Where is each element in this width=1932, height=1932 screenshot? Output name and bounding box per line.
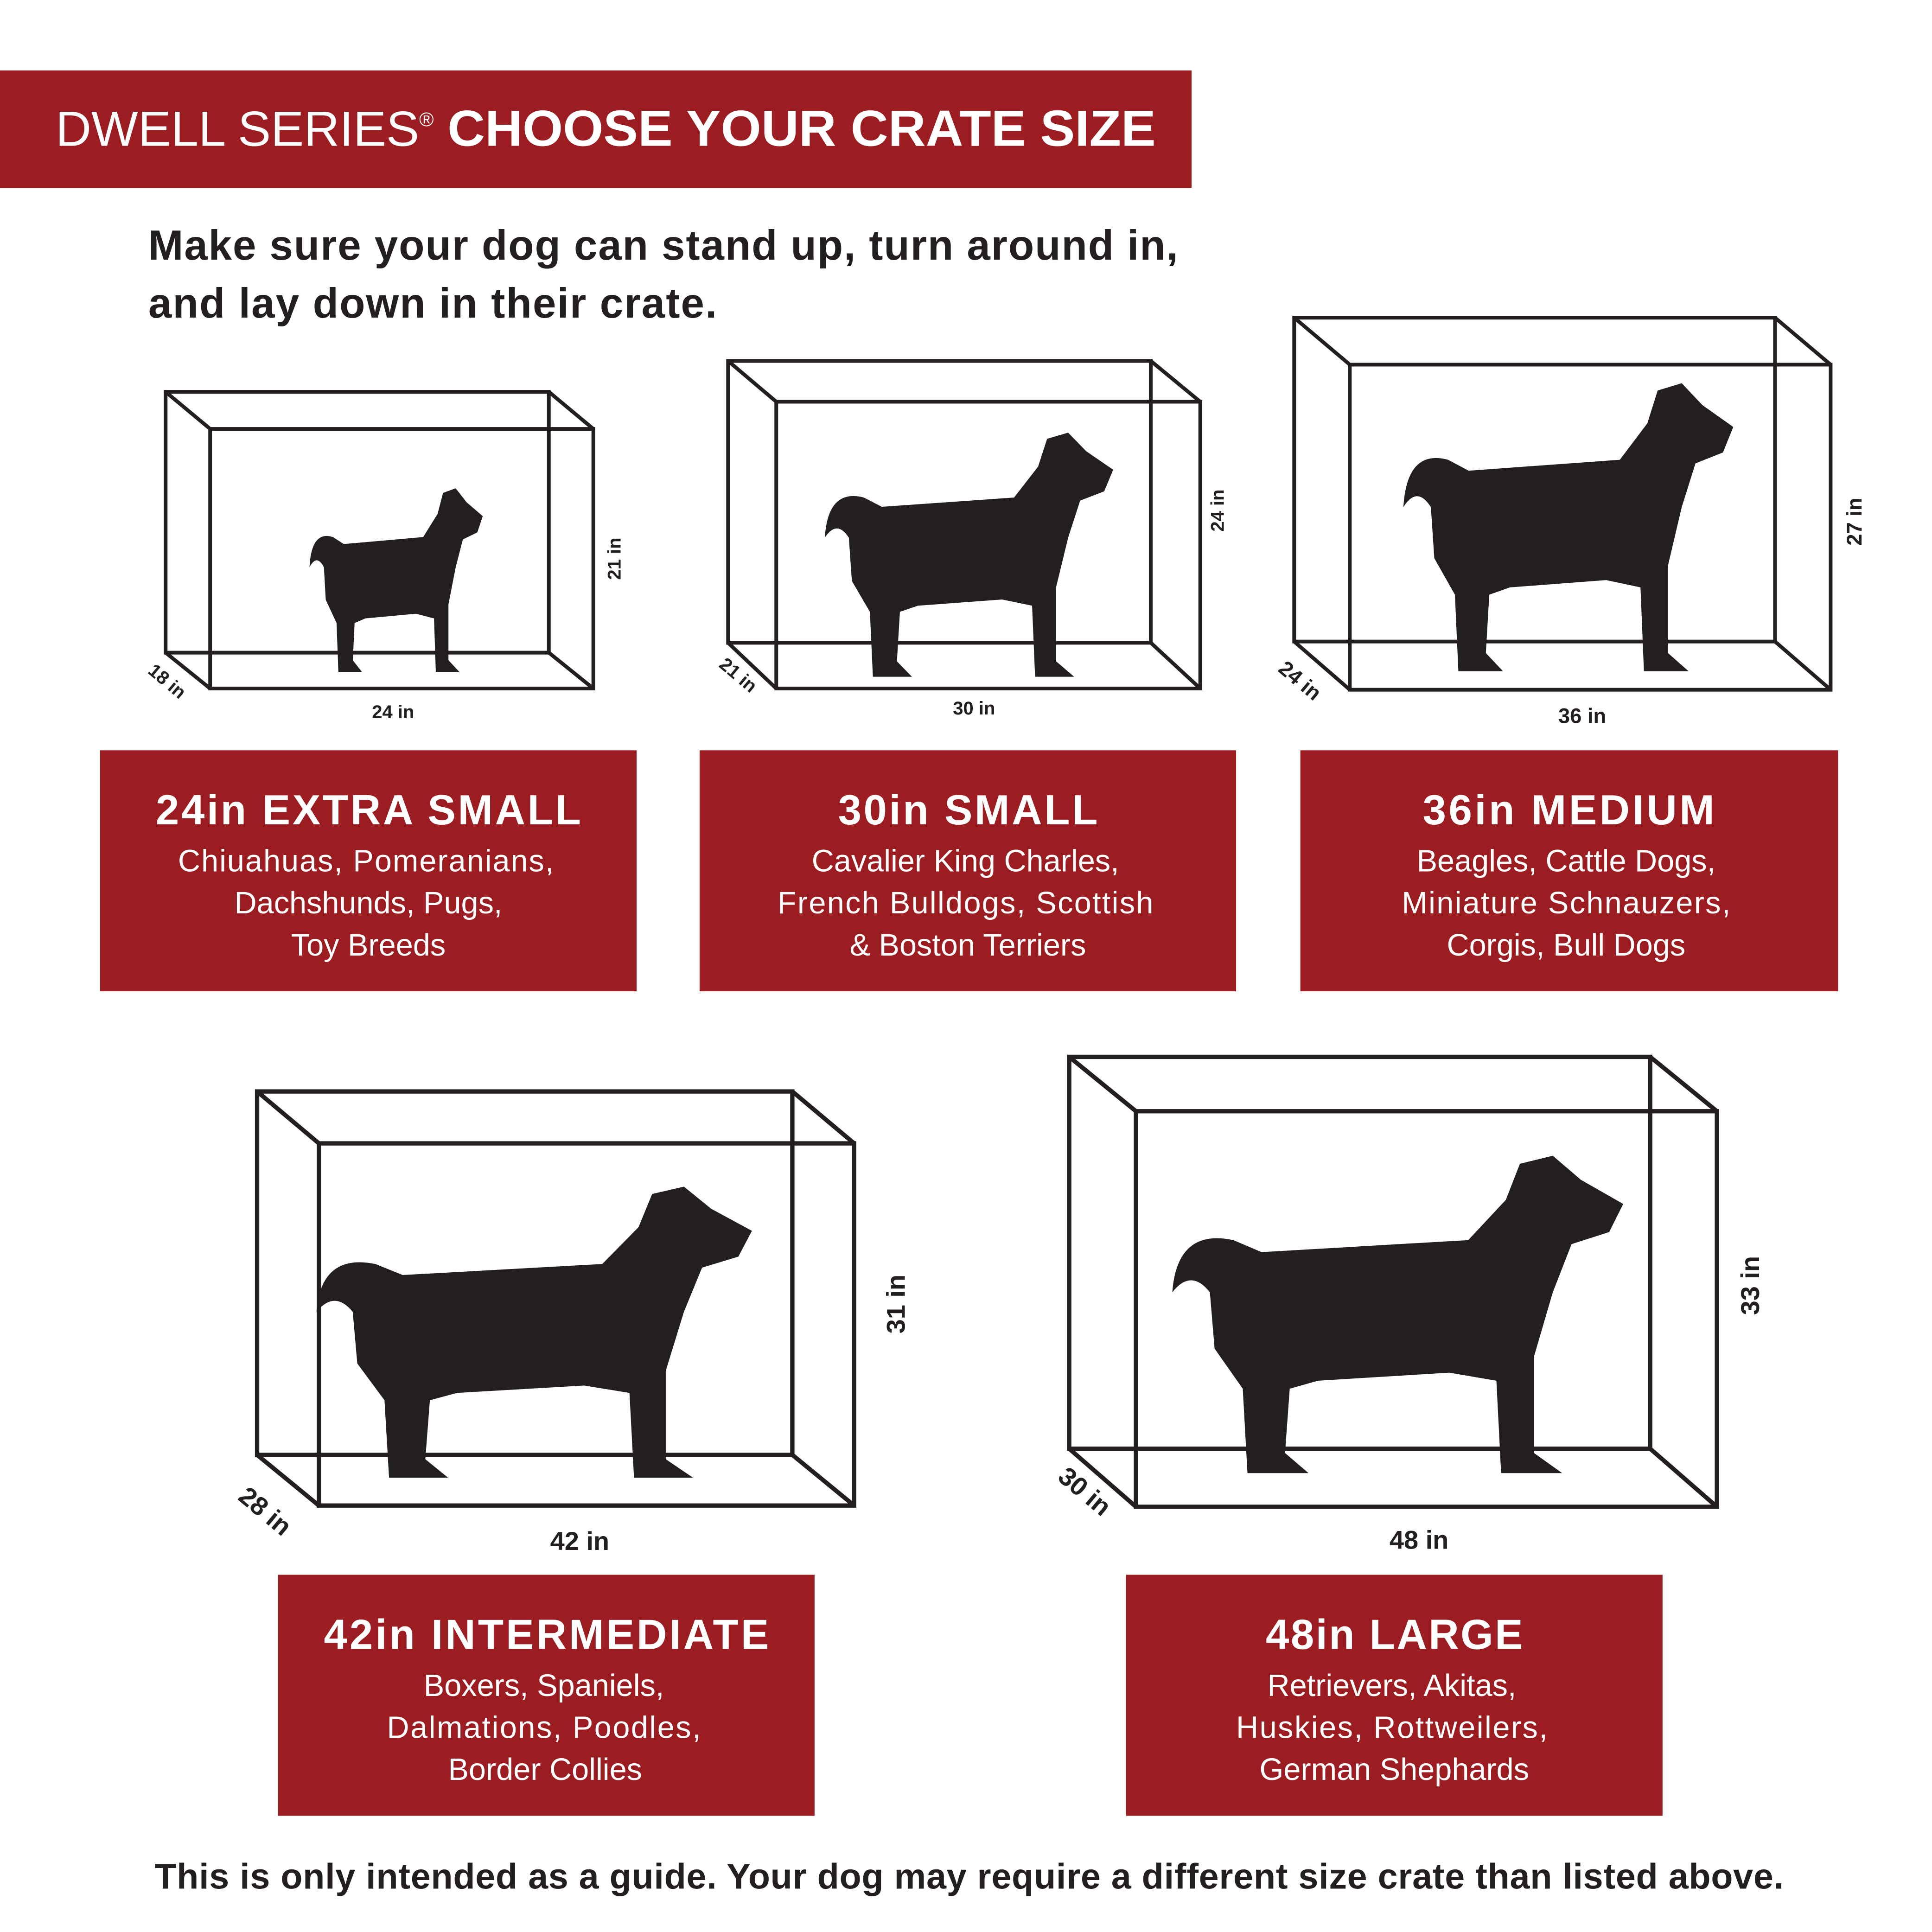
crate: medium	[1294, 318, 1830, 690]
footer note: This is only intended as a guide. Your dog may require a different size crate than listed above.	[154, 1857, 1784, 1897]
panel: intermediate: Boxers, Spaniels,	[424, 1669, 664, 1703]
panel: intermediate: 42in INTERMEDIATE	[324, 1611, 769, 1658]
dimensions: small: 24 in	[1207, 490, 1228, 532]
panel: medium	[1301, 750, 1838, 991]
dimensions: extra small	[144, 537, 625, 722]
dog: intermediate	[317, 1186, 752, 1478]
panel: intermediate: Border Collies	[448, 1753, 642, 1787]
panel: extra small: Dachshunds, Pugs,	[235, 886, 502, 920]
dimensions: medium	[1274, 497, 1866, 728]
dimensions: small	[715, 490, 1228, 719]
panel: small: & Boston Terriers	[850, 928, 1086, 963]
panel: extra small: 24in EXTRA SMALL	[156, 787, 581, 834]
dimensions: medium: 36 in	[1558, 704, 1606, 728]
panel: large	[1126, 1575, 1663, 1816]
dimensions: small: 30 in	[953, 698, 995, 719]
crate: large	[1069, 1057, 1717, 1507]
dimensions: extra small: 18 in	[144, 660, 190, 703]
dimensions: large: 33 in	[1735, 1256, 1765, 1315]
dimensions: medium: 27 in	[1843, 497, 1866, 546]
panel: medium: Beagles, Cattle Dogs,	[1417, 844, 1715, 879]
panel: intermediate: Dalmations, Poodles,	[387, 1710, 701, 1745]
dimensions: intermediate: 28 in	[233, 1481, 298, 1541]
panel: small	[700, 750, 1236, 991]
dimensions: extra small: 24 in	[372, 702, 414, 722]
title bar: CHOOSE YOUR CRATE SIZE	[447, 101, 1156, 157]
subtitle: and lay down in their crate.	[148, 280, 717, 327]
subtitle: Make sure your dog can stand up, turn around in,	[148, 222, 1178, 269]
panel: small: 30in SMALL	[838, 787, 1097, 834]
dimensions: intermediate: 31 in	[881, 1275, 911, 1333]
panel: large: German Shephards	[1259, 1753, 1529, 1787]
dimensions: intermediate: 42 in	[550, 1526, 609, 1556]
panel: extra small	[100, 750, 637, 991]
dog: large	[1172, 1156, 1623, 1473]
panel: large: Huskies, Rottweilers,	[1236, 1710, 1548, 1745]
crate: intermediate	[257, 1091, 854, 1505]
dimensions: intermediate	[233, 1275, 911, 1556]
crate: small	[728, 361, 1200, 689]
dimensions: medium: 24 in	[1274, 656, 1326, 705]
title bar	[0, 70, 1192, 188]
panel: large: 48in LARGE	[1266, 1611, 1523, 1658]
title bar: DWELL SERIES	[56, 101, 419, 157]
panel: intermediate	[278, 1575, 815, 1816]
dimensions: large: 48 in	[1390, 1525, 1448, 1555]
panel: extra small: Toy Breeds	[291, 928, 446, 963]
panel: medium: Corgis, Bull Dogs	[1447, 928, 1685, 963]
panel: medium: Miniature Schnauzers,	[1402, 886, 1730, 920]
crate: extra small	[166, 392, 593, 689]
dimensions: small: 21 in	[715, 654, 761, 696]
dimensions: extra small: 21 in	[604, 537, 625, 580]
dog: medium	[1403, 383, 1733, 671]
dimensions: large	[1053, 1256, 1765, 1555]
dog: small	[825, 433, 1113, 677]
dimensions: large: 30 in	[1053, 1461, 1117, 1521]
panel: small: Cavalier King Charles,	[812, 844, 1119, 879]
panel: extra small: Chiuahuas, Pomeranians,	[178, 844, 554, 879]
panel: large: Retrievers, Akitas,	[1267, 1669, 1516, 1703]
panel: small: French Bulldogs, Scottish	[778, 886, 1153, 920]
title bar: ®	[419, 108, 434, 131]
panel: medium: 36in MEDIUM	[1423, 787, 1715, 834]
dog: extra small	[310, 488, 483, 672]
subtitle	[148, 222, 1178, 327]
